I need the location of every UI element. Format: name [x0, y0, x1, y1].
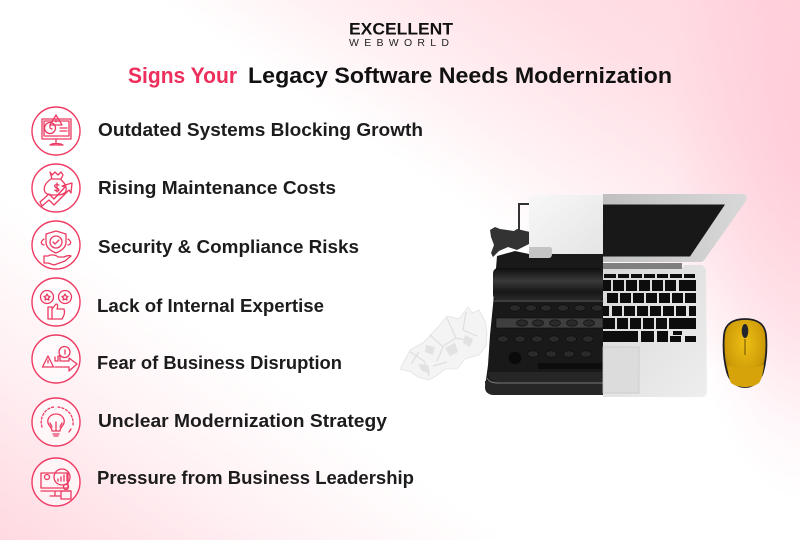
icon: warning, factory and arrow — [32, 335, 80, 383]
logo: Excellent WebWorld — [349, 20, 454, 49]
trackpad — [603, 347, 639, 393]
icon: presenter, chart and manager — [32, 458, 80, 506]
translucent paper tab — [529, 247, 552, 258]
icon: light bulb in gear — [32, 398, 80, 446]
list item: leadership pressure — [32, 458, 414, 506]
laptop screen — [603, 204, 725, 256]
illustration: laptop half — [603, 194, 747, 397]
icon: money bag with rising arrow — [32, 164, 80, 212]
logo: Excellent WebWorld: WEBWORLD — [349, 37, 449, 49]
logo: Excellent WebWorld: EXCELLENT — [349, 20, 454, 38]
keyboard — [603, 274, 696, 342]
typewriter body — [485, 251, 603, 395]
list item: business disruption — [32, 335, 342, 383]
label: Fear of Business Disruption — [97, 352, 342, 373]
mouse body — [724, 319, 766, 387]
laptop lid — [603, 194, 747, 262]
platen roller — [493, 268, 603, 300]
typewriter carriage lever — [490, 203, 530, 257]
label: Security & Compliance Risks — [98, 236, 359, 257]
label: Rising Maintenance Costs — [98, 177, 336, 198]
list item: rising costs — [32, 164, 336, 212]
laptop base — [603, 265, 707, 397]
label: Outdated Systems Blocking Growth — [98, 119, 423, 140]
mouse scroll wheel — [742, 324, 748, 338]
mouse lower shell — [727, 365, 764, 387]
illustration: crumpled paper — [400, 307, 487, 380]
list item: security — [32, 221, 359, 269]
front plate — [485, 372, 603, 395]
list item: lack of expertise — [32, 278, 324, 326]
label: Pressure from Business Leadership — [97, 467, 414, 488]
icon: shield in hand — [32, 221, 80, 269]
illustration: typewriter half — [485, 195, 603, 395]
icon: monitor with warning and clock — [32, 107, 80, 155]
laptop hinge — [603, 263, 682, 269]
illustration: yellow mouse — [724, 319, 766, 387]
type bars — [496, 305, 603, 364]
space bar — [538, 363, 603, 369]
title: Legacy Software Needs Modernization — [248, 63, 672, 88]
list item: unclear strategy — [32, 398, 388, 446]
paper sheet — [529, 195, 603, 255]
title: Signs Your — [128, 63, 237, 88]
icon: stars and thumbs up — [32, 278, 80, 326]
list item: outdated systems — [32, 107, 423, 155]
label: Unclear Modernization Strategy — [98, 410, 388, 431]
label: Lack of Internal Expertise — [97, 295, 324, 316]
